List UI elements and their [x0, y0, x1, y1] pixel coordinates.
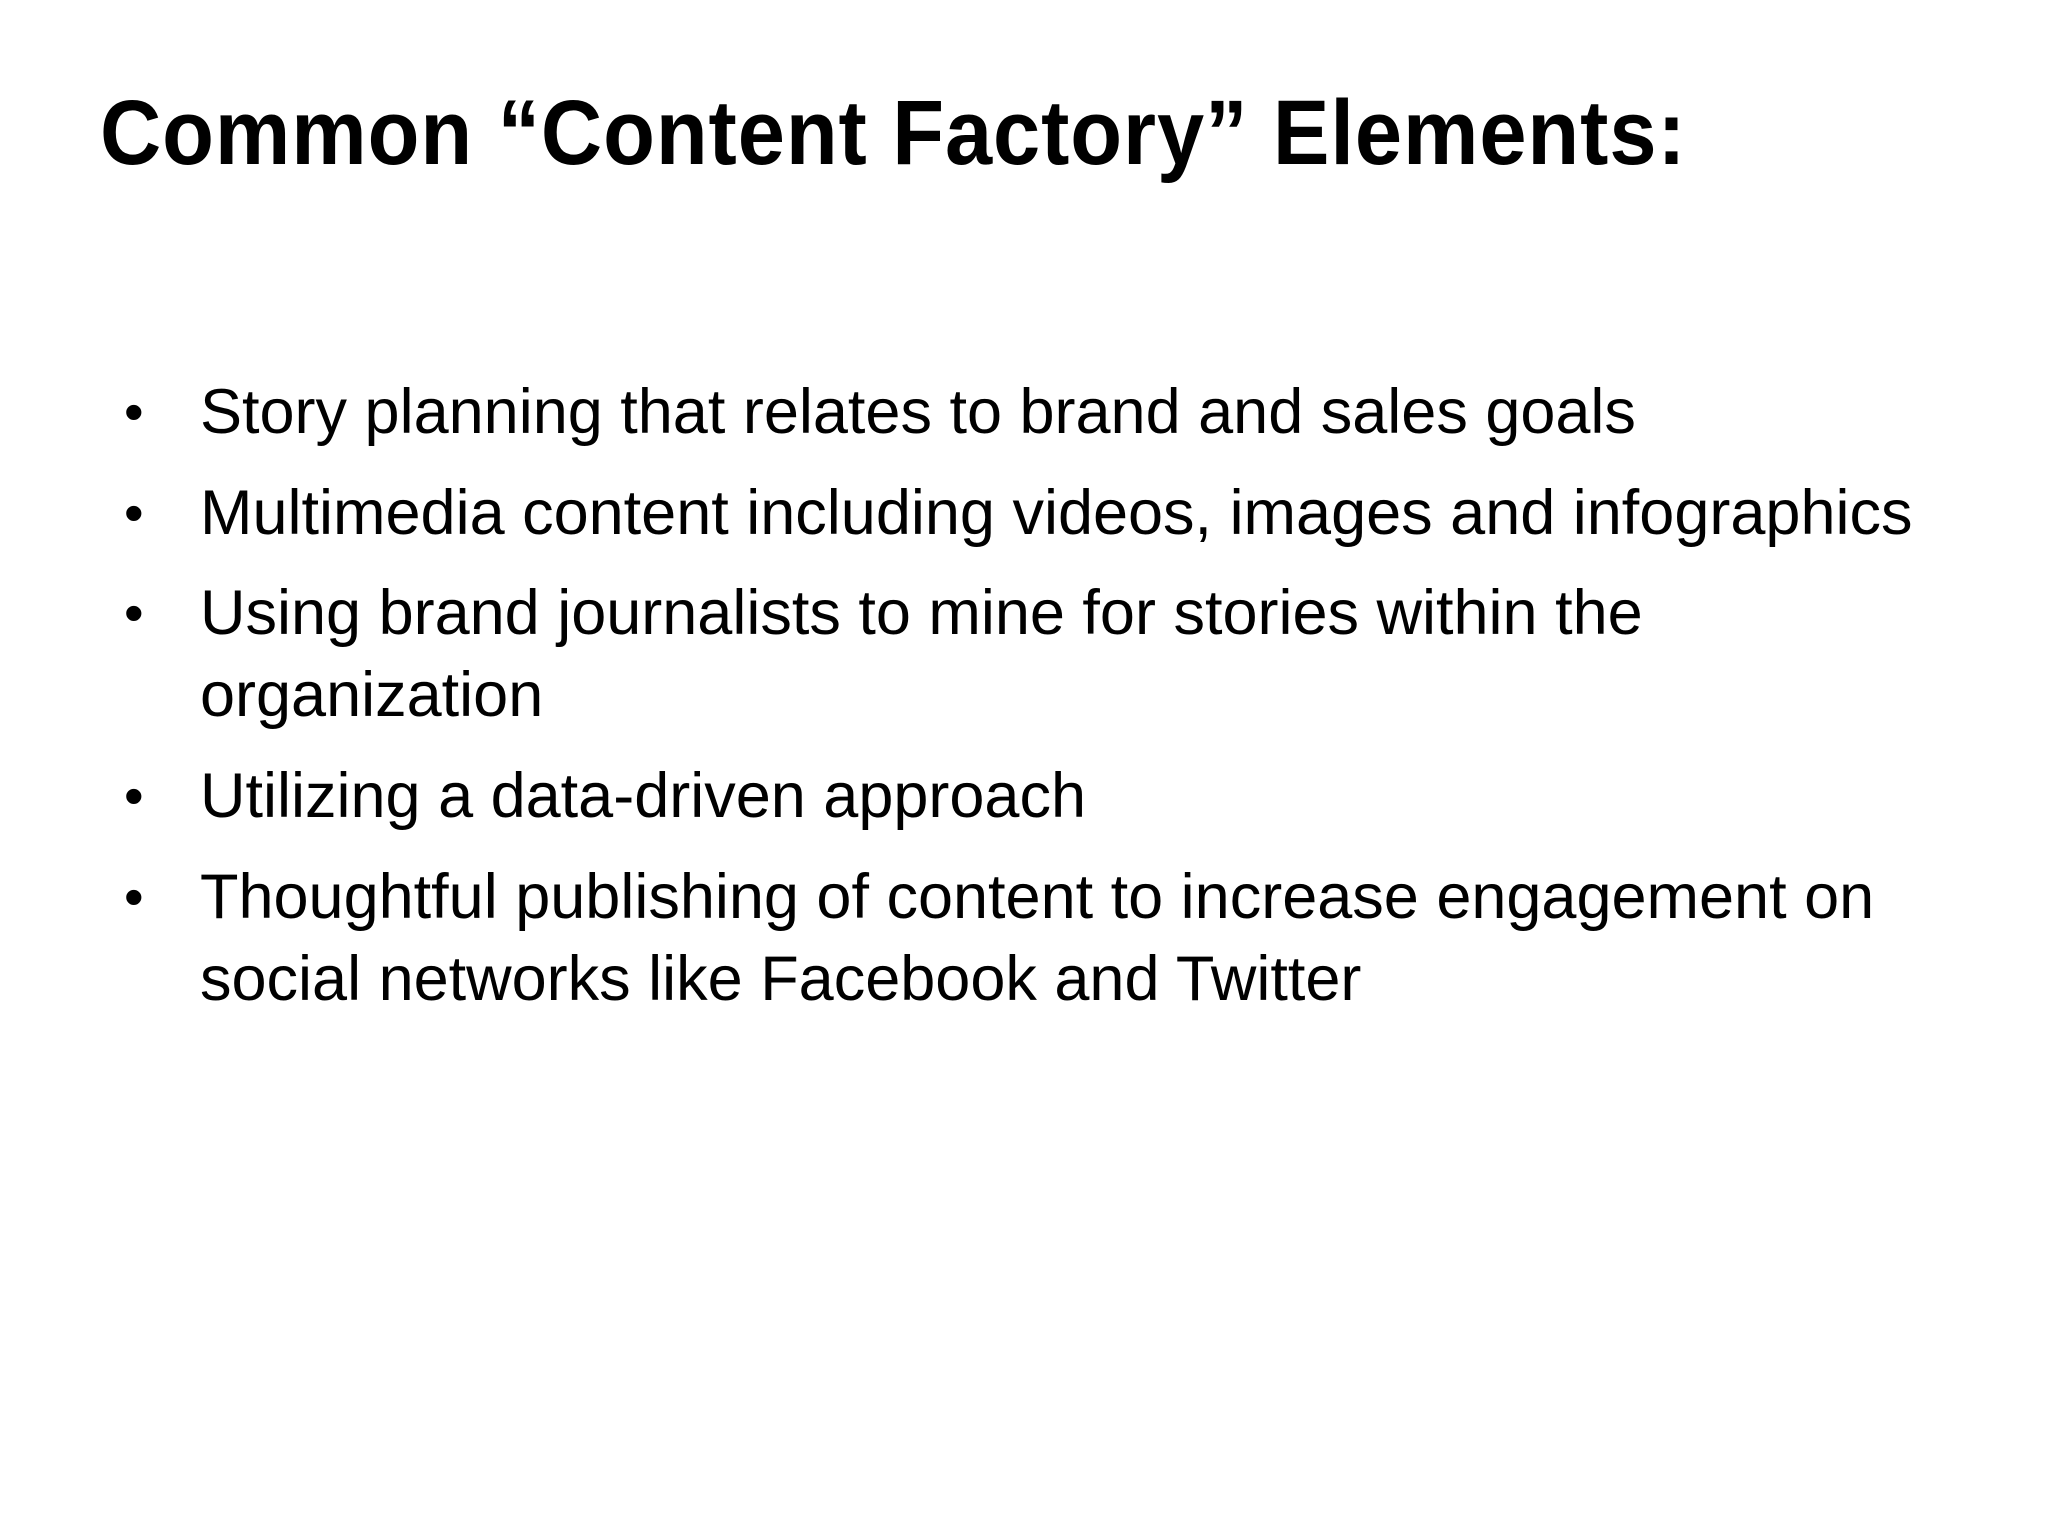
bullet item 5: social networks like Facebook and Twitter	[200, 944, 1361, 1014]
bullet item 5: Thoughtful publishing of content to increase engagement on	[200, 862, 1874, 932]
bullet item 4: •	[124, 764, 144, 827]
bullet item 1: Story planning that relates to brand and sales goals	[200, 377, 1636, 447]
bullet item 2: •	[124, 481, 144, 544]
bullet item 5	[124, 862, 1874, 1014]
bullet item 3: •	[124, 581, 144, 644]
title: Common “Content Factory” Elements:	[100, 82, 1687, 184]
bullet item 2: Multimedia content including videos, images and infographics	[200, 478, 1912, 548]
bullet item 5: •	[124, 865, 144, 928]
bullet item 4: Utilizing a data-driven approach	[200, 761, 1086, 831]
bullet item 3: organization	[200, 660, 543, 730]
bullet item 3	[124, 578, 1643, 730]
bullet item 3: Using brand journalists to mine for stories within the	[200, 578, 1643, 648]
bullet item 1: •	[124, 380, 144, 443]
